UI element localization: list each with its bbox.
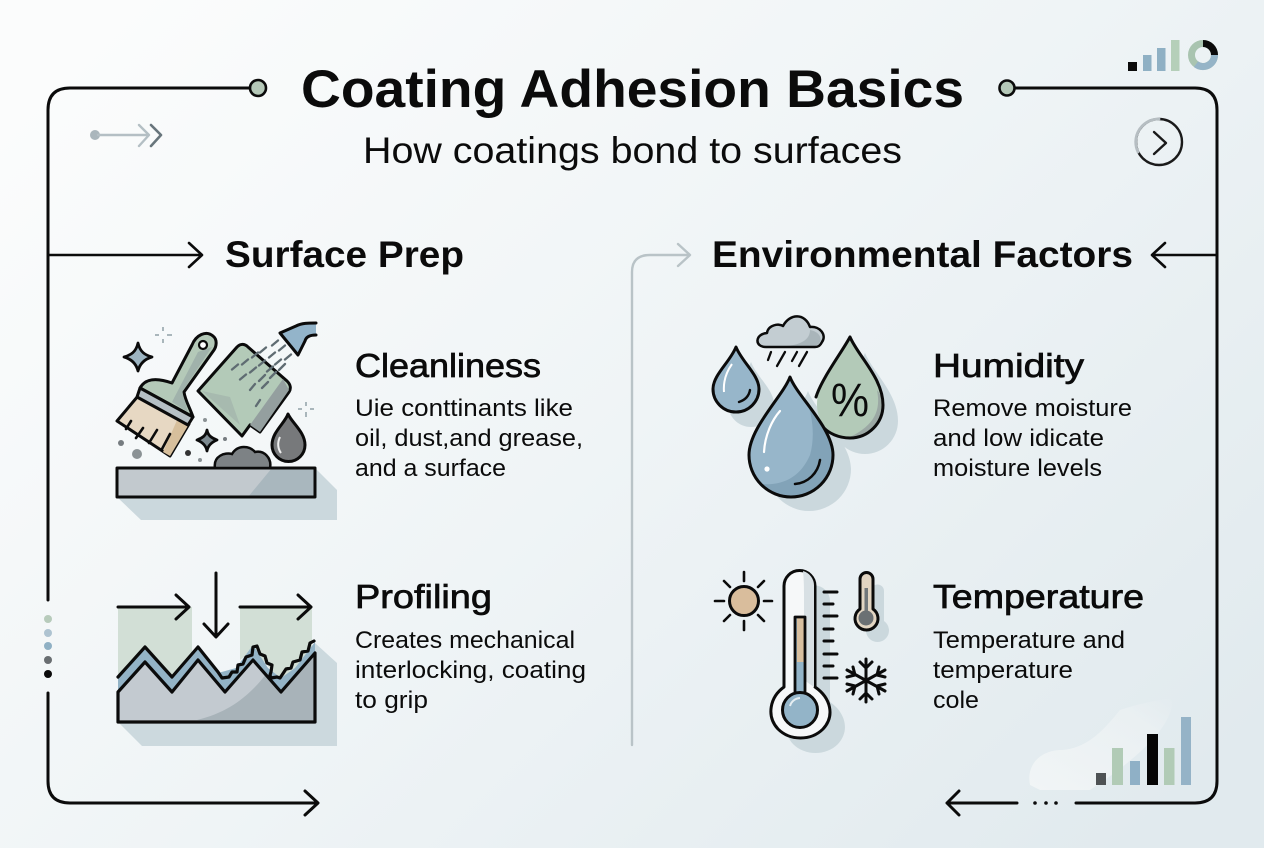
dot scale on left edge <box>44 615 52 678</box>
title: Coating Adhesion Basics <box>301 60 964 119</box>
icon: cleaning brush, cloth, spray and slab <box>117 323 337 520</box>
label: Temperature: Temperature and <box>933 627 1125 654</box>
frame node: left of title <box>250 80 266 96</box>
label: Humidity: moisture levels <box>933 455 1102 482</box>
label: Profiling: interlocking, coating <box>355 657 586 684</box>
label: Temperature: temperature <box>933 657 1073 684</box>
icon: water drops, cloud and percent <box>713 316 898 511</box>
label: Profiling <box>355 578 586 714</box>
heading: Surface Prep: Surface Prep <box>225 234 464 275</box>
label: Cleanliness: and a surface <box>355 455 506 482</box>
label: Humidity: and low idicate <box>933 425 1104 452</box>
label: Temperature: cole <box>933 687 979 714</box>
label: Cleanliness: Cleanliness <box>355 347 541 384</box>
label: Cleanliness: oil, dust,and grease, <box>355 425 583 452</box>
label: Profiling: Creates mechanical <box>355 627 575 654</box>
label: Cleanliness: Uie conttinants like <box>355 395 573 422</box>
decorative double-chevron arrow <box>90 125 161 146</box>
label: Cleanliness <box>355 347 583 482</box>
dotted shadow behind bar chart <box>1029 698 1172 790</box>
circular next-arrow icon <box>1136 119 1182 165</box>
icon: water drops, cloud and percent: % <box>831 373 869 426</box>
label: Profiling: Profiling <box>355 578 492 615</box>
label: Humidity: Remove moisture <box>933 395 1132 422</box>
panel: surface prep <box>44 323 586 746</box>
arrow into Surface Prep heading <box>48 243 202 267</box>
central divider arrow <box>632 244 690 745</box>
ellipsis dots on bottom line <box>1033 801 1058 805</box>
heading: Environmental Factors: Environmental Factors <box>712 234 1133 275</box>
label: Temperature: Temperature <box>933 578 1144 615</box>
label: Humidity: Humidity <box>933 347 1085 384</box>
label: Temperature <box>933 578 1144 714</box>
icon: thermometers, sun and snowflake <box>715 570 889 753</box>
subtitle: How coatings bond to surfaces <box>363 130 902 171</box>
frame node: right of title <box>1000 80 1014 96</box>
label: Humidity <box>933 347 1132 482</box>
mini bar and donut chart, top right <box>1128 40 1215 71</box>
outer frame connector lines <box>48 88 1217 815</box>
bar chart, bottom right <box>1096 717 1191 785</box>
arrow into Environmental Factors heading <box>1152 243 1217 267</box>
icon: surface profile with directional arrows <box>118 573 337 746</box>
panel: environmental factors <box>713 316 1144 753</box>
label: Profiling: to grip <box>355 687 428 714</box>
